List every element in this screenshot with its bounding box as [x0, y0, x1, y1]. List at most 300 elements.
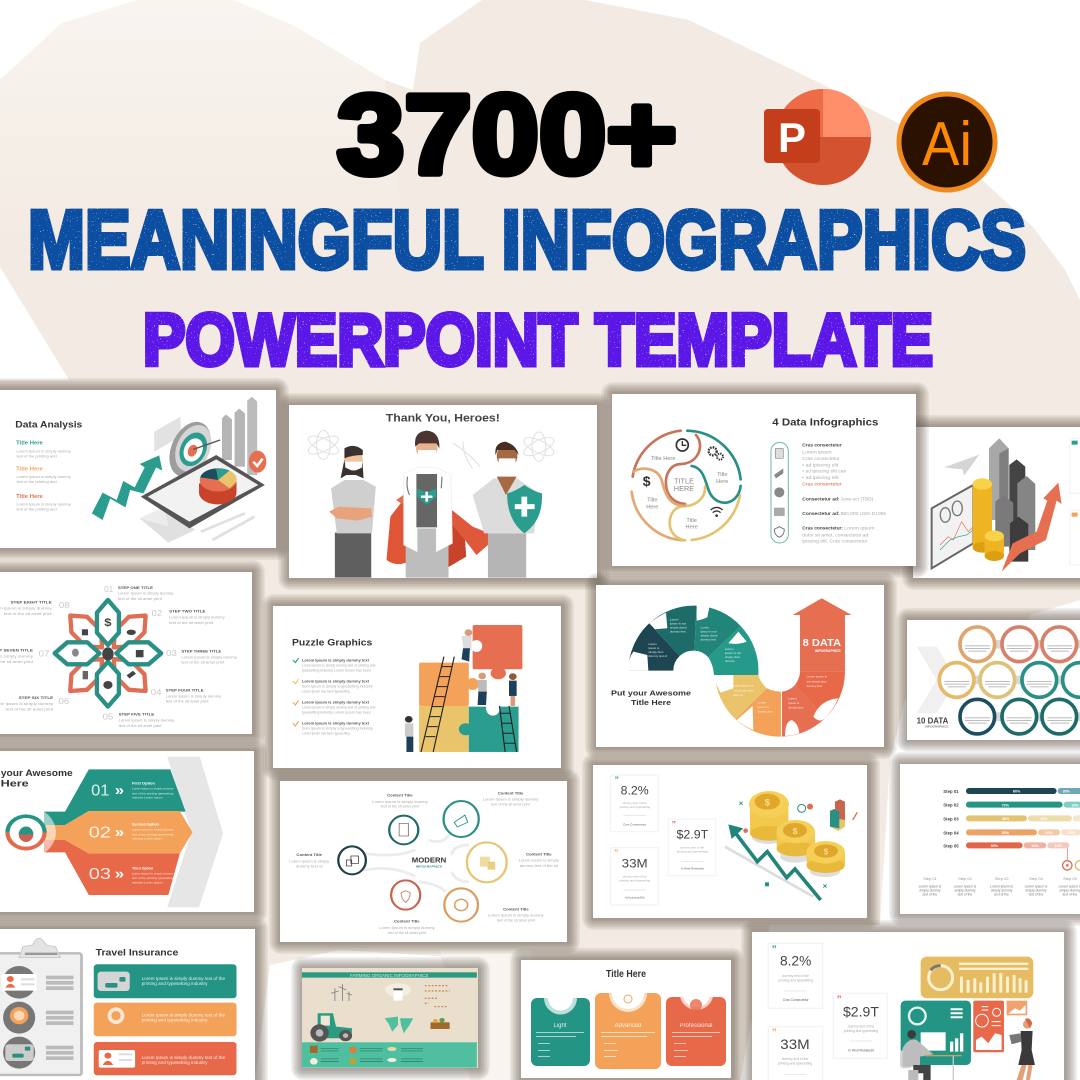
node captions: text of the sit amet print — [491, 802, 530, 807]
step captions: Step 02 — [958, 876, 973, 881]
step captions: simply dummy — [954, 888, 976, 892]
dot chart — [425, 986, 450, 1007]
option labels: » — [115, 783, 124, 799]
step captions: Step 05 — [1063, 876, 1078, 881]
segment text: simply dumb — [701, 634, 718, 638]
insurance card 2: printing and typesetting industry — [142, 1018, 208, 1023]
bar percentages: 10% — [1068, 831, 1076, 835]
option 1 band — [44, 769, 186, 825]
icon: PowerPoint logo — [764, 89, 871, 185]
icon: envelopes — [140, 417, 195, 543]
step labels: 08 — [59, 601, 70, 610]
step labels — [0, 585, 238, 728]
slide title: INFOGRAPHICS — [925, 724, 948, 728]
option 2 band — [44, 811, 192, 853]
centre title: INFOGRAPHICS — [416, 865, 443, 868]
connected circles — [939, 627, 1080, 734]
bar percentages: 20% — [1045, 831, 1053, 835]
segment text — [648, 618, 827, 714]
centre title: MODERN — [412, 856, 446, 864]
diagram icons and labels: Here — [646, 504, 658, 510]
gold coin stacks — [973, 478, 1004, 561]
bar row labels: Step 03 — [943, 816, 959, 821]
diagram icons and labels — [643, 439, 728, 531]
slide title: Data Analysis — [15, 420, 83, 430]
slide title: Title Here — [606, 969, 646, 980]
bar percentages: 60% — [1013, 790, 1021, 794]
diagram icons and labels: Here — [686, 525, 698, 531]
diagram icons and labels: Title — [647, 498, 658, 504]
stat card: 8.2%: Cras Consectetur — [783, 998, 809, 1002]
segment text: Lorem — [725, 647, 734, 651]
text block — [802, 442, 887, 544]
stat card: 8.2% — [611, 774, 658, 832]
bar percentages: 30% — [991, 844, 999, 848]
figure: doctor — [404, 431, 452, 578]
segment text: ipsum is not — [725, 651, 741, 655]
step labels: Lorem Ipsum is simply dummy — [181, 655, 238, 660]
produce crate — [431, 1018, 450, 1029]
stat card: $2.9T: In Wnd Reblandit — [848, 1048, 874, 1052]
step labels: text of the sit amet print — [181, 660, 225, 665]
option labels: » — [115, 825, 124, 841]
segment text: Lorem — [788, 696, 797, 700]
segment text: ipsum is — [648, 646, 660, 650]
bar percentages — [991, 790, 1080, 848]
node captions: Lorem Ipsum is simply — [289, 859, 329, 863]
stat card: 8.2%: ” — [615, 774, 619, 784]
node captions: Content Title — [296, 852, 323, 857]
step labels: STEP FIVE TITLE — [119, 712, 154, 717]
step labels: Lorem Ipsum is simply dummy — [166, 694, 222, 699]
panel: 4 Data Infographics slide — [612, 394, 917, 566]
node captions: Content Title — [526, 852, 552, 857]
arrow caption: 8 DATA — [803, 638, 841, 649]
checklist: Lorem Ipsum is simply dummy text — [302, 679, 370, 683]
pricing card: Professional — [666, 997, 726, 1066]
world map — [385, 1017, 413, 1033]
stat card: 8.2%: ” — [772, 944, 777, 955]
insurance card 2 — [94, 1003, 237, 1036]
step captions: text of the — [994, 892, 1009, 896]
bottom grass band — [302, 1042, 477, 1068]
checklist: Lorem Ipsum has been typesetting — [302, 689, 350, 693]
panel: farming organic infographic — [302, 968, 478, 1068]
stat card: 8.2%: 8.2% — [780, 953, 811, 969]
stat card: 33M: 33M — [622, 857, 648, 871]
option labels: Lorem ipsum is simply dummy — [132, 872, 174, 875]
clipboard — [0, 938, 82, 1075]
node captions: Content Title — [387, 793, 414, 798]
bar percentages: 30% — [1072, 803, 1080, 807]
insurance card 1: printing and typesetting industry — [142, 981, 208, 986]
option labels: Third Option — [132, 867, 153, 870]
banner — [302, 972, 477, 978]
slide title: Thank You, Heroes! — [386, 411, 500, 424]
list: title items: text of the printing and — [16, 479, 57, 484]
stat card: $2.9T: $2.9T — [676, 828, 709, 842]
step captions: simply dummy — [1059, 888, 1080, 892]
diagram icons and labels: TITLE — [674, 477, 694, 486]
stat card: 33M: 33M — [780, 1036, 810, 1052]
slide title: Put your Awesome — [611, 689, 691, 698]
option 3 band — [44, 840, 180, 895]
step labels: STEP ONE TITLE — [118, 585, 153, 590]
figure: presenter — [1009, 1018, 1035, 1080]
marker pin — [1063, 848, 1080, 870]
step labels: Lorem Ipsum is simply dummy — [118, 591, 174, 596]
figures on puzzle — [405, 629, 517, 752]
text block: $50,000 USD-D1055 — [841, 511, 887, 516]
segment text: Lorem ipsum is — [733, 684, 754, 688]
pricing card: Advanced: Advanced — [615, 1023, 641, 1029]
bar percentages: 40% — [1002, 817, 1010, 821]
stat card: 8.2%: printing and typesetting — [778, 979, 813, 983]
option labels: industry Lorem ipsum — [132, 881, 163, 884]
list: title items: Title Here — [16, 467, 43, 472]
stat card: 8.2%: printing and typesetting — [619, 805, 650, 809]
panel: Modern infographics slide — [280, 781, 568, 942]
snake segments upper — [628, 606, 758, 675]
checklist: Lorem Ipsum is simply dummy text of printing and — [302, 663, 375, 668]
connecting soft tendrils — [364, 833, 469, 892]
list: title items: text of the printing and — [16, 454, 57, 459]
slide title: 10 DATA — [917, 716, 949, 725]
stat card: $2.9T: printing and typesetting — [677, 850, 708, 854]
step captions: text of the — [1063, 892, 1077, 896]
step labels: STEP THREE TITLE — [181, 649, 221, 654]
node captions: Content Title — [503, 907, 530, 912]
stat card: $2.9T: dummy text of the — [680, 845, 705, 849]
pricing card: Advanced — [595, 993, 661, 1069]
step captions: Lorem Ipsum is — [954, 884, 977, 888]
insurance card 1 — [94, 964, 237, 998]
text block: Lorem ipsum — [844, 526, 875, 531]
node captions: Content Title — [498, 791, 524, 796]
puzzle pieces — [419, 625, 522, 752]
segment text: ipsum is — [758, 705, 769, 709]
diagram icons and labels: Here — [716, 479, 728, 485]
option labels: 01 — [91, 783, 109, 799]
panel: Travel Insurance slide — [0, 929, 256, 1080]
wind turbines — [331, 984, 352, 1001]
text block: Cras consectetur — [802, 442, 842, 447]
step captions: Step 01 — [923, 876, 938, 881]
step labels: STEP FOUR TITLE — [166, 688, 204, 693]
icon pill — [771, 442, 788, 543]
step labels: text of the sit amet print — [166, 699, 209, 704]
segment text: ipsum is — [788, 701, 800, 705]
panel: eight steps star slide — [0, 572, 253, 734]
icon: grey arrows — [201, 513, 254, 540]
bar percentages: 10% — [1031, 844, 1039, 848]
step labels: text of the sit amet print — [6, 707, 54, 711]
stat card: 8.2%: dummy text of the — [623, 801, 647, 805]
segment text: ipsum is not — [701, 630, 717, 634]
arrow caption — [803, 638, 841, 653]
panel: step progress bars slide — [900, 764, 1080, 914]
option labels: text of the printing typesetting — [132, 876, 174, 880]
step captions: text of the — [1029, 892, 1043, 896]
checklist — [293, 658, 375, 735]
step labels: 05 — [103, 712, 114, 721]
step captions: simply dummy — [919, 888, 941, 892]
stat card: $2.9T: printing and typesetting — [844, 1029, 878, 1033]
node captions: Lorem Ipsum is simply dummy — [372, 799, 428, 804]
diagram icons and labels: Title — [686, 518, 697, 524]
stat card: 33M: printing and typesetting — [778, 1061, 812, 1065]
star diagram: $ — [104, 616, 112, 629]
stat card: $2.9T: ” — [837, 994, 842, 1005]
text block: • ad ipiscing elit cari — [802, 469, 846, 474]
icon: PowerPoint logo: P — [778, 114, 806, 161]
mini bar blocks — [830, 799, 845, 831]
step labels: Lorem Ipsum is simply dummy — [119, 718, 175, 723]
stat card: 8.2%: dummy text of the — [782, 974, 809, 978]
figure: seated man — [900, 1030, 962, 1080]
stat card: 33M: printing and typesetting — [619, 879, 650, 883]
stat card: $2.9T: dummy text of the — [848, 1024, 874, 1028]
panel: isometric finance slide — [913, 427, 1080, 578]
node captions: text of the sit amet print — [497, 918, 536, 923]
chart board — [932, 485, 973, 568]
segment text: dummy text — [701, 638, 716, 642]
node captions: dummy text of the sit — [520, 863, 559, 868]
text block: Cras consectetur: — [802, 526, 844, 531]
stat card: 33M: dummy text of the — [782, 1057, 808, 1061]
step captions: Step 04 — [1029, 876, 1044, 881]
pricing card: Light — [531, 998, 590, 1066]
stat card: 8.2%: Cras Consectetur — [623, 822, 646, 826]
step labels: Lorem Ipsum is simply dummy — [169, 615, 225, 620]
yellow chart panel — [921, 957, 1033, 998]
list: title items — [16, 441, 71, 512]
segment text: Lorem — [701, 626, 710, 630]
step labels: 01 — [104, 585, 113, 594]
option labels: 03 — [89, 866, 111, 883]
stat card: 33M: ” — [614, 848, 618, 858]
segment text: Lorem ipsum is — [807, 675, 827, 679]
option labels: 02 — [89, 824, 111, 841]
coin stacks — [749, 791, 845, 877]
node captions — [289, 791, 559, 935]
stat card: 33M — [611, 848, 658, 905]
farmer figure — [385, 983, 411, 1001]
heading: PowerPoint Template: POWERPOINT TEMPLATE — [143, 300, 933, 381]
segment text: not simply dum — [807, 679, 827, 683]
icon: check badge — [249, 451, 266, 473]
icon: target — [162, 417, 220, 481]
insurance card 2: Lorem Ipsum is simply dummy text of the — [142, 1013, 225, 1018]
stat card: $2.9T — [833, 993, 887, 1058]
stat card: 33M: dummy text of the — [623, 874, 647, 878]
pricing card: Professional: Professional — [679, 1023, 713, 1029]
panel: 10 data slide — [907, 620, 1080, 740]
side cards — [1070, 438, 1080, 565]
teal monitor panel — [901, 1001, 971, 1065]
node captions: text of the sit amet print — [388, 930, 427, 935]
text block: Cras consectetur — [802, 456, 840, 461]
slide title: 4 Data Infographics — [772, 418, 879, 429]
step labels: text of the sit amet print — [118, 596, 163, 601]
coin stacks: $ — [793, 826, 798, 836]
bar row labels: Step 01 — [943, 789, 959, 794]
segment text: Lorem — [758, 700, 767, 704]
step captions: text of the — [923, 892, 937, 896]
grey chevron — [167, 757, 223, 907]
segment text: dummy — [733, 693, 744, 697]
step labels: text of the sit amet print — [169, 620, 214, 625]
text block: Consectetur ad: — [802, 511, 840, 516]
checklist: Sum Ipsum is simply a typesetting industry — [302, 684, 373, 689]
segment text: dummy — [725, 659, 735, 663]
bottom legend items — [310, 1046, 423, 1065]
growth arrow — [1002, 483, 1062, 572]
node captions: Lorem Ipsum is simply — [519, 858, 559, 863]
small decorations — [739, 802, 857, 888]
stat card: 33M — [768, 1027, 823, 1080]
step labels: STEP SIX TITLE — [19, 695, 53, 700]
icon: tablet with pie chart — [141, 455, 265, 528]
bar percentages: 50% — [1002, 831, 1010, 835]
stat card: 8.2% — [768, 943, 823, 1008]
panel: pricing Title Here slide — [521, 960, 732, 1078]
centre title — [412, 856, 446, 868]
list: title items: Lorem Ipsum is simply dummy — [16, 449, 71, 454]
checklist: Lorem Ipsum is simply dummy text — [302, 700, 370, 704]
checklist: Lorem Ipsum is simply dummy text — [302, 721, 370, 725]
segment text: simply dumb — [670, 626, 687, 630]
circle captions — [944, 645, 1072, 724]
bar percentages: 30% — [1040, 817, 1048, 821]
slide title: Title Here — [631, 698, 671, 707]
slide title: Travel Insurance — [96, 948, 179, 958]
stat card: 33M: Ad Ipiscing Elit — [625, 896, 645, 900]
bar percentages: 10% — [1055, 844, 1063, 848]
coin stacks: $ — [765, 798, 771, 808]
segment text: Lorem — [648, 642, 657, 646]
orange mini chart — [1007, 1001, 1027, 1015]
insurance card 1: Lorem Ipsum is simply dummy text of the — [142, 976, 225, 981]
option labels: text of the printing typesetting — [132, 792, 174, 795]
step labels: 07 — [39, 649, 50, 658]
red cape — [387, 493, 498, 567]
step labels: 02 — [152, 609, 162, 618]
segment text: dummy text of — [648, 654, 667, 658]
bar row labels: Step 02 — [943, 803, 959, 808]
panel: dashboard statistics slide — [752, 932, 1065, 1080]
step captions: Step 03 — [995, 876, 1009, 881]
step captions — [919, 876, 1080, 896]
text block: • ad ipiscing elit — [802, 462, 839, 467]
panel: coins statistics slide — [593, 765, 868, 918]
decorative atoms — [305, 430, 557, 468]
panel: 8 Data slide — [596, 585, 885, 747]
option labels: Lorem ipsum is simply dummy — [132, 787, 174, 791]
step captions: Lorem Ipsum is — [990, 884, 1013, 888]
list: title items: text of the printing and — [16, 507, 57, 512]
segment text: dummy text — [670, 630, 686, 634]
segment icon tabs — [627, 605, 838, 736]
icon: Illustrator logo — [899, 94, 995, 190]
stat card: $2.9T: In Wnd Reblandit — [681, 867, 704, 871]
panel: three options arrow slide — [0, 751, 255, 912]
step labels: STEP EIGHT TITLE — [10, 600, 52, 605]
checklist: Lorem Ipsum is simply dummy text of printing and — [302, 705, 375, 710]
apple badge — [0, 806, 56, 858]
red profile panel — [973, 1001, 1004, 1052]
segment text: ipsum is not — [670, 622, 686, 626]
slide title: Puzzle Graphics — [292, 638, 373, 648]
node captions: Lorem Ipsum is simply dummy — [488, 913, 544, 918]
option labels: » — [115, 867, 124, 882]
segment text: simply dum — [725, 655, 741, 659]
node captions: Content Title — [394, 919, 420, 923]
ladders — [421, 657, 517, 752]
panel: Thank You Heroes slide — [289, 405, 598, 578]
step labels: text of the sit amet print — [119, 723, 162, 728]
stat card: 8.2%: 8.2% — [621, 783, 649, 797]
text block: ipiscing elit. Cras consectetur — [802, 539, 868, 544]
step captions: Lorem Ipsum is — [1025, 884, 1048, 888]
segment text: dummy text — [807, 684, 822, 688]
step labels: 06 — [59, 697, 70, 706]
large chevron watermark — [917, 647, 957, 713]
step captions: text of the — [958, 892, 972, 896]
pricing card: Light: Light — [553, 1023, 567, 1029]
bar percentages: 70% — [1002, 803, 1010, 807]
stacked bars — [966, 788, 1080, 848]
banner: FARMING ORGANIC INFOGRAPHICS — [350, 973, 428, 978]
icon: rising arrow — [92, 455, 162, 520]
text block: dolor sit amet, consectetur ad — [802, 532, 869, 537]
coin stacks: $ — [824, 847, 829, 856]
stat card: $2.9T: $2.9T — [843, 1003, 879, 1019]
checklist: Lorem Ipsum is simply dummy text — [302, 658, 370, 662]
stat card: $2.9T — [668, 819, 716, 876]
text block: Consectetur ad: — [802, 497, 840, 502]
isometric buildings — [989, 438, 1035, 562]
option labels: industry Lorem ipsum — [132, 837, 163, 841]
arrow caption: INFOGRAPHICS — [815, 649, 841, 653]
checklist: Lorem Ipsum has been typesetting — [302, 731, 350, 735]
node captions: Lorem Ipsum is simply dummy — [483, 797, 538, 802]
panel: Puzzle Graphics slide — [273, 606, 562, 768]
bar row labels — [943, 789, 959, 848]
snake segments lower — [715, 598, 852, 737]
segment text: simply dum — [758, 710, 773, 714]
icon: paper plane — [944, 455, 979, 476]
step labels: STEP TWO TITLE — [169, 609, 206, 614]
list: title items: Title Here — [16, 441, 43, 447]
step labels: 03 — [166, 649, 177, 658]
insurance card 3: printing and typesetting industry — [142, 1060, 208, 1065]
panel: Data Analysis slide — [0, 390, 277, 548]
slide title — [0, 769, 73, 789]
option labels: text of the printing typesetting — [132, 833, 174, 836]
diagram icons and labels: HERE — [674, 484, 694, 493]
bar percentages: 30% — [1063, 790, 1071, 794]
diagram icons and labels: Title Here — [651, 456, 675, 462]
text block: • ad ipiscing elit — [802, 475, 839, 480]
insurance card 3 — [94, 1042, 237, 1075]
declining chart arrow — [725, 824, 821, 900]
icon: Illustrator logo: Ai — [922, 110, 972, 179]
clipboard icons — [2, 966, 37, 1069]
option labels: Second Option — [132, 823, 159, 827]
option labels: industry Lorem ipsum — [132, 796, 163, 800]
step labels: 04 — [151, 688, 162, 697]
